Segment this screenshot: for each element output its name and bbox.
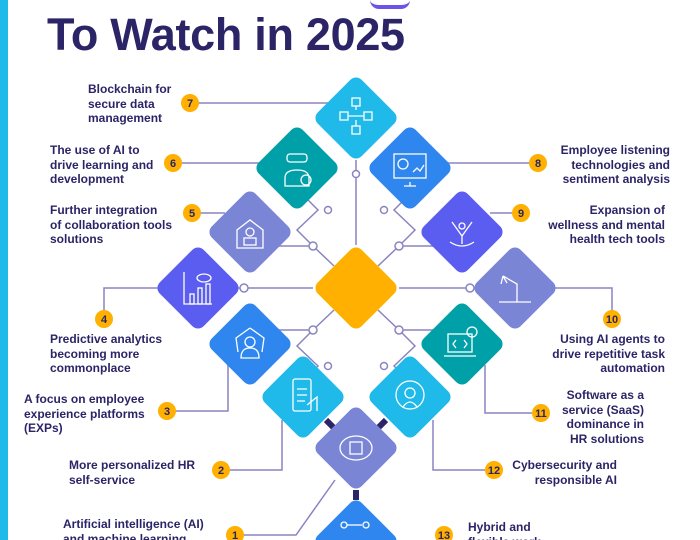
- side bar: [0, 0, 8, 540]
- label 6: The use of AI to: [50, 143, 140, 157]
- diamond 11: [418, 300, 506, 388]
- label 10: [552, 332, 665, 375]
- diamond 7: [312, 74, 400, 162]
- number badges: 6: [170, 158, 176, 170]
- diamond 2: [259, 353, 347, 441]
- label 1: Artificial intelligence (AI): [63, 517, 204, 531]
- diamond 10: [471, 244, 559, 332]
- diamond 4: [154, 244, 242, 332]
- label 12: Cybersecurity and: [512, 458, 617, 472]
- label 3: (EXPs): [24, 421, 63, 435]
- diamond 3: [206, 300, 294, 388]
- label 10: Using AI agents to: [560, 332, 665, 346]
- diamond 1: [312, 404, 400, 492]
- label 5: of collaboration tools: [50, 218, 172, 232]
- label 6: development: [50, 172, 124, 186]
- label 3: [24, 392, 145, 435]
- diamond 8: [366, 124, 454, 212]
- label 6: drive learning and: [50, 158, 153, 172]
- label 12: responsible AI: [535, 472, 617, 486]
- label 8: [561, 143, 670, 186]
- label 2: More personalized HR: [69, 458, 195, 472]
- number badges: 7: [187, 98, 193, 110]
- number badges: 4: [101, 314, 108, 326]
- label 11: dominance in: [567, 417, 644, 431]
- label 11: service (SaaS): [562, 402, 644, 416]
- label 11: Software as a: [567, 388, 644, 402]
- label 13: [468, 520, 541, 540]
- label 4: commonplace: [50, 361, 131, 375]
- label 9: [548, 203, 666, 246]
- number badges: 9: [518, 208, 524, 220]
- title: To Watch in 2025: [47, 9, 405, 60]
- label 7: secure data: [88, 96, 155, 110]
- label 13: Hybrid and: [468, 520, 531, 534]
- label 8: Employee listening: [561, 143, 670, 157]
- diamond 9: [418, 188, 506, 276]
- number badges: 2: [218, 465, 224, 477]
- label 1: [63, 517, 204, 540]
- label 3: experience platforms: [24, 406, 145, 420]
- diamond 6: [253, 124, 341, 212]
- title remnant: [370, 0, 410, 9]
- label 2: self-service: [69, 472, 135, 486]
- number badges: [95, 94, 621, 540]
- label 4: [50, 332, 162, 375]
- number badges: 3: [164, 406, 170, 418]
- diamond 12: [366, 353, 454, 441]
- label 5: Further integration: [50, 203, 157, 217]
- diamond 13: [312, 497, 400, 540]
- label 4: Predictive analytics: [50, 332, 162, 346]
- label 8: sentiment analysis: [563, 172, 670, 186]
- label 5: solutions: [50, 232, 103, 246]
- number badges: 11: [535, 408, 547, 420]
- number badges: 12: [488, 465, 500, 477]
- number badges: 5: [189, 208, 195, 220]
- label 7: [88, 82, 172, 125]
- label 9: health tech tools: [570, 232, 665, 246]
- label 7: management: [88, 111, 162, 125]
- connector lines: [104, 103, 612, 535]
- label 12: [512, 458, 617, 486]
- label 7: Blockchain for: [88, 82, 171, 96]
- label 2: [69, 458, 195, 486]
- label 11: HR solutions: [570, 432, 644, 446]
- label 11: [562, 388, 644, 446]
- label 10: automation: [600, 361, 665, 375]
- label 3: A focus on employee: [24, 392, 144, 406]
- dark connectors: [326, 420, 386, 500]
- label 9: wellness and mental: [548, 218, 665, 232]
- number badges: 10: [606, 314, 618, 326]
- label 8: technologies and: [571, 158, 670, 172]
- label 5: [50, 203, 172, 246]
- label 6: [50, 143, 153, 186]
- label 9: Expansion of: [590, 203, 665, 217]
- center diamond: [312, 244, 400, 332]
- diamond 5: [206, 188, 294, 276]
- label 10: drive repetitive task: [552, 346, 665, 360]
- number badges: 8: [535, 158, 541, 170]
- label 4: becoming more: [50, 346, 139, 360]
